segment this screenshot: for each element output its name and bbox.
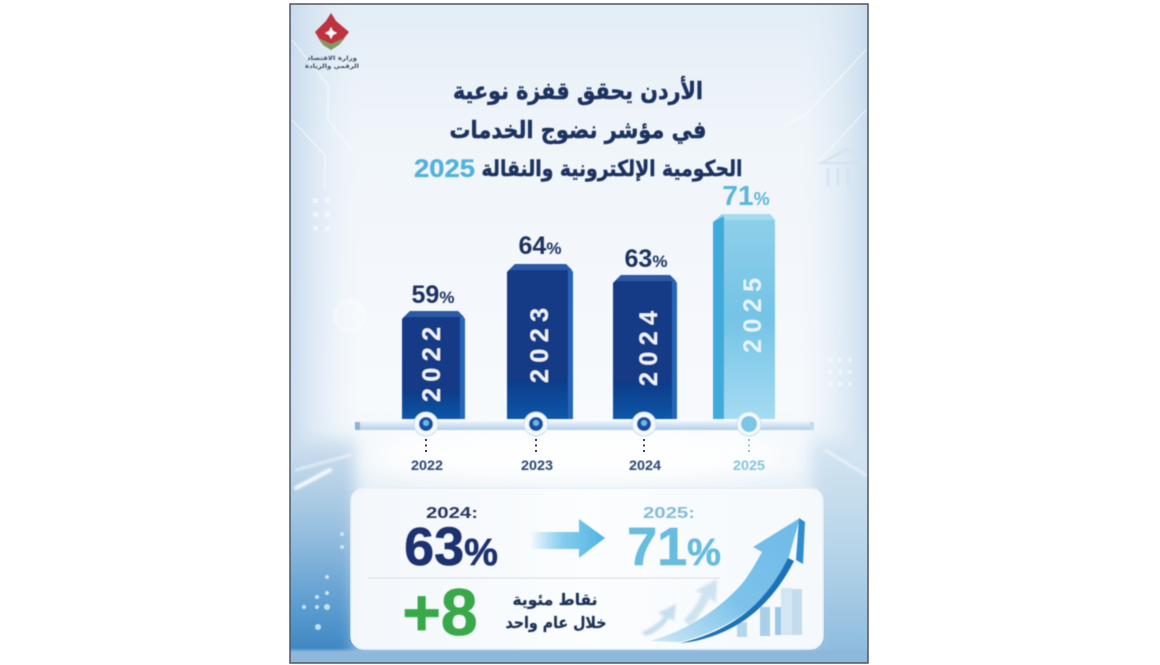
logo caption: وزارة الاقتصاد <box>307 55 357 62</box>
value 63%: 63% <box>625 245 667 273</box>
timeline year labels: 2025 <box>733 457 765 473</box>
timeline year labels: 2022 <box>411 457 443 473</box>
value 59%: 59% <box>412 281 454 309</box>
icon: small growth arrows <box>642 579 717 636</box>
bar 2025: 2025 <box>739 278 767 353</box>
bar 2022: 2022 <box>418 327 446 402</box>
2024 label: 2024: <box>426 505 478 522</box>
title <box>414 76 742 183</box>
bar 2024: 2024 <box>635 311 663 386</box>
bar 2023: 2023 <box>526 308 554 383</box>
value 71%: 71% <box>722 180 770 211</box>
icon: ministry logo <box>315 13 349 50</box>
timeline year labels: 2023 <box>521 457 553 473</box>
percentage points caption <box>506 590 606 632</box>
panel: summary <box>351 488 823 649</box>
logo caption <box>305 55 359 70</box>
divider <box>368 577 720 579</box>
title: الأردن يحقق قفزة نوعية <box>453 76 703 105</box>
bar 2022 <box>402 311 465 419</box>
percentage points caption: خلال عام واحد <box>506 613 606 632</box>
bar 2025 <box>713 214 775 419</box>
bar 2023 <box>507 264 573 419</box>
63% value: 63% <box>404 517 498 577</box>
title: 2025 <box>414 155 475 183</box>
title: الحكومية الإلكترونية والنقالة <box>482 157 742 182</box>
timeline connectors <box>426 439 749 455</box>
timeline node 2023 <box>524 412 548 436</box>
logo caption: الرقمي والريادة <box>305 63 359 70</box>
timeline track <box>355 412 814 436</box>
timeline year labels <box>411 457 765 473</box>
timeline node 2022 <box>414 412 438 436</box>
title: في مؤشر نضوج الخدمات <box>450 116 706 144</box>
bar 2024 <box>613 275 677 419</box>
percentage points caption: نقاط مئوية <box>512 590 598 609</box>
2025 label: 2025: <box>643 505 695 522</box>
71% value: 71% <box>627 517 721 577</box>
timeline node 2025 <box>737 412 761 436</box>
bar chart <box>402 180 775 419</box>
page frame <box>290 4 868 663</box>
timeline year labels: 2024 <box>629 457 661 473</box>
timeline node 2024 <box>632 412 656 436</box>
arrow: 2024 to 2025 <box>530 519 605 558</box>
+8 value: +8 <box>402 575 478 649</box>
value 64%: 64% <box>519 232 561 260</box>
icon: large growth arrow <box>650 518 805 643</box>
chart icon: growth bars <box>737 588 802 637</box>
infographic background panel <box>270 4 890 665</box>
